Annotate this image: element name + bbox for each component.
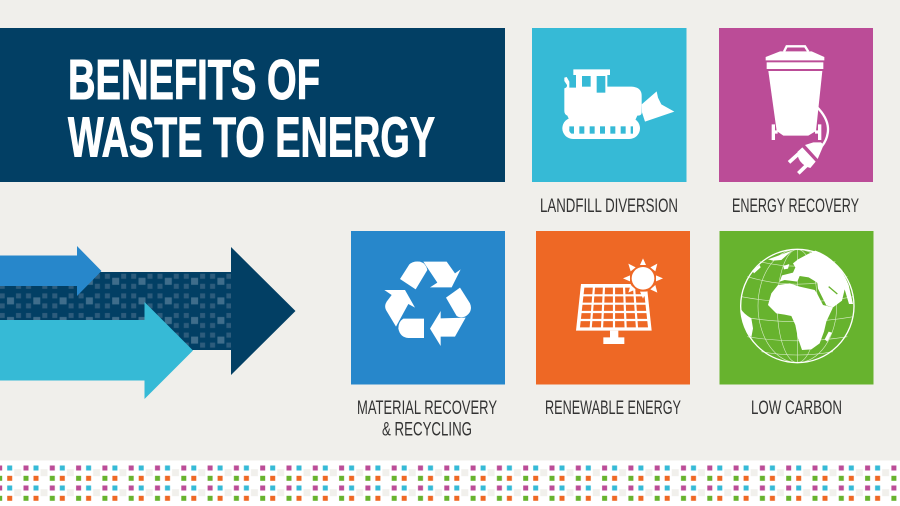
- icon: bulldozer: [562, 69, 674, 139]
- label: material recovery and recycling: & RECYCLING: [382, 418, 472, 440]
- icon: waste bin with plug: [766, 46, 828, 173]
- arrow: dark navy patterned: [0, 247, 296, 375]
- panel: landfill diversion: [532, 28, 686, 182]
- arrow: cyan: [0, 302, 193, 399]
- icon: solar panel and sun: [576, 258, 663, 344]
- dotted footer strip: [0, 460, 900, 506]
- label: renewable energy: RENEWABLE ENERGY: [545, 397, 681, 419]
- icon: recycling: [384, 261, 471, 346]
- title: WASTE TO ENERGY: [68, 106, 435, 170]
- title: [68, 48, 435, 170]
- label: material recovery and recycling: MATERIAL RECOVERY: [357, 397, 497, 419]
- label: low carbon: LOW CARBON: [751, 397, 842, 419]
- panel: material recovery: [351, 231, 505, 384]
- arrow: medium blue: [0, 246, 102, 296]
- panel: renewable energy: [536, 231, 690, 384]
- panel: energy recovery: [719, 28, 873, 182]
- title banner: [0, 28, 505, 182]
- icon: globe: [741, 249, 854, 363]
- panel: low carbon: [720, 231, 874, 384]
- label: material recovery and recycling: [357, 397, 497, 440]
- title: BENEFITS OF: [68, 48, 320, 112]
- label: landfill diversion: LANDFILL DIVERSION: [540, 195, 678, 217]
